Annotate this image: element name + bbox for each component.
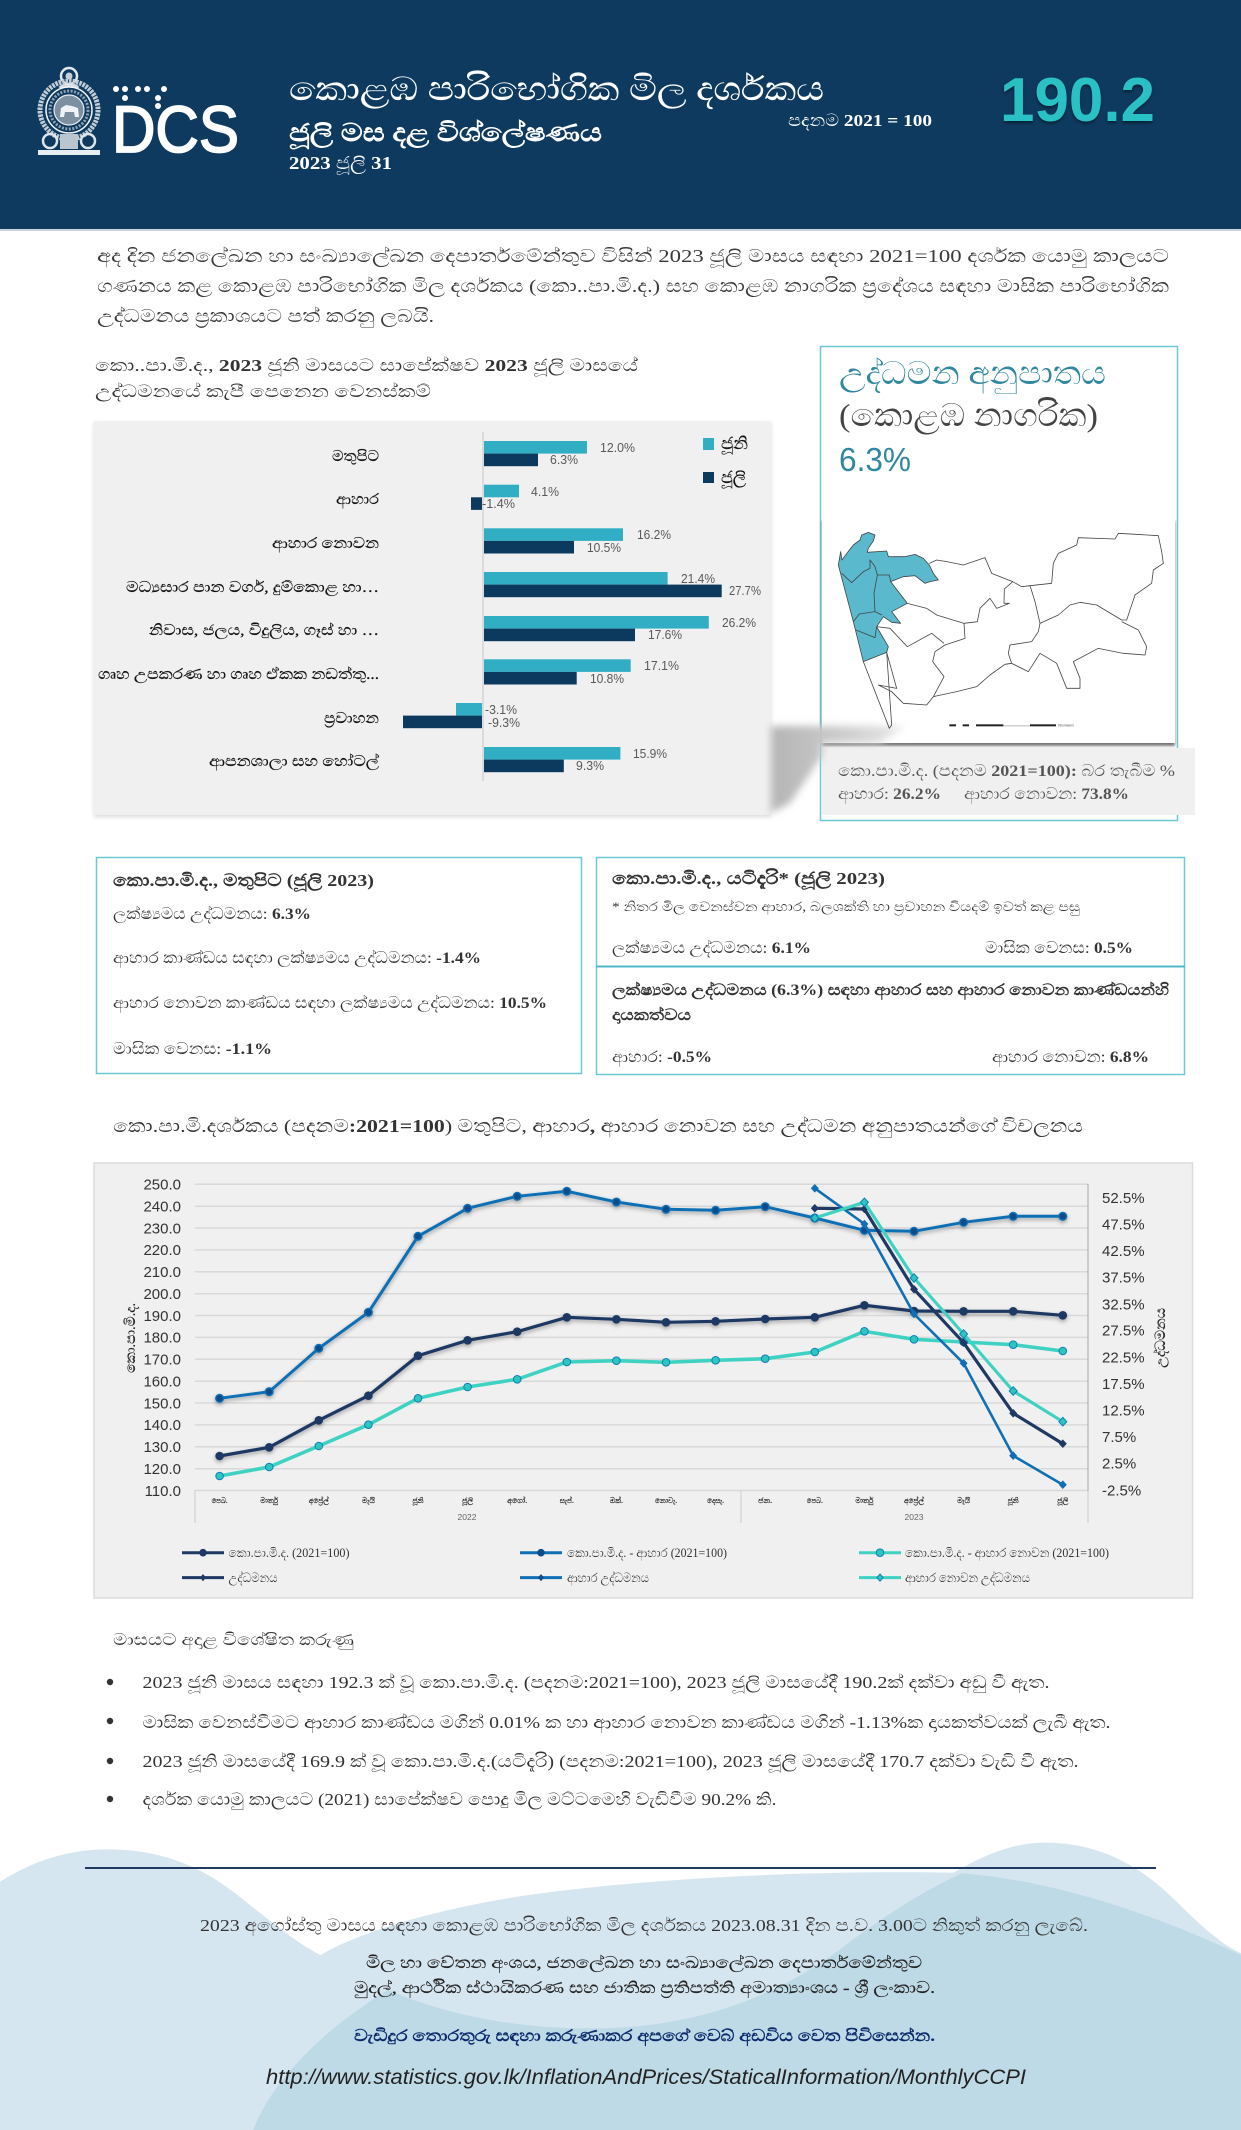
chart legend: කො.පා.මි.ද. - ආහාර (2021=100)	[567, 1546, 727, 1561]
chart legend	[182, 1546, 1109, 1586]
value labels: 6.3%	[550, 453, 578, 467]
value labels: 9.3%	[576, 759, 604, 773]
category labels: නිවාස, ජලය, විදුලිය, ගෑස් හා …	[149, 621, 379, 639]
left axis labels: 190.0	[143, 1308, 181, 1325]
value labels: 4.1%	[531, 485, 559, 499]
subheading: (කොළඹ නාගරික)	[839, 397, 1098, 434]
series: non-food index	[216, 1328, 1067, 1480]
chart legend: කො.පා.මි.ද. - ආහාර නොවන (2021=100)	[905, 1546, 1109, 1561]
year labels: 2023	[905, 1512, 924, 1522]
category labels: මතුපිට	[332, 449, 379, 465]
left axis labels: 210.0	[143, 1264, 181, 1281]
left axis labels: 140.0	[143, 1417, 181, 1434]
value labels: 16.2%	[637, 528, 671, 542]
month labels: දෙසැ.	[707, 1496, 724, 1506]
intro text	[97, 246, 1169, 327]
panel: core CCPI and contributions: ලක්ෂ්‍යමය උද්ධමනය: 6.1%	[612, 939, 811, 958]
bar chart heading: කො..පා.මි.ද., 2023 ජූනි මාසයට සාපේක්ෂව 2023 ජූලි මාසයේ	[95, 356, 638, 376]
panel: core CCPI and contributions: මාසික වෙනස: 0.5%	[985, 940, 1133, 957]
month labels: මැයි	[362, 1495, 375, 1505]
month labels: ඔක්.	[610, 1495, 623, 1505]
axis titles: කො.පා.මි.ද.	[124, 1303, 139, 1373]
right axis labels: 32.5%	[1102, 1296, 1145, 1313]
key points list: දර්ශක යොමු කාලයට (2021) සාපේක්ෂව පොදු මිල මට්ටමෙහි වැඩිවීම 90.2% කි.	[142, 1790, 776, 1810]
axis title: inflation: උද්ධමනය	[1153, 1308, 1169, 1368]
contributions: ලක්ෂ්‍යමය උද්ධමනය (6.3%) සඳහා ආහාර සහ ආහාර නොවන කාණ්ඩයන්හි	[612, 981, 1170, 1001]
month labels: මාර්තු	[855, 1495, 874, 1506]
series: headline inflation	[811, 1204, 1067, 1448]
left axis labels: 170.0	[143, 1352, 181, 1369]
category labels: මධ්‍යසාර පාන වර්ග, දුම්කොළ හා…	[126, 579, 379, 596]
left axis labels: 250.0	[143, 1176, 181, 1194]
left axis labels: 180.0	[143, 1330, 181, 1347]
category labels: ගෘහ උපකරණ හා ගෘහ ඒකක නඩත්තු...	[98, 665, 379, 683]
inflation value: 6.3%	[839, 441, 911, 478]
right axis labels: 47.5%	[1102, 1216, 1145, 1233]
panel: core CCPI and contributions: ආහාර නොවන: 6.8%	[992, 1049, 1149, 1067]
category labels: ආපනශාලා සහ හෝටල්	[209, 752, 380, 771]
right axis labels: 52.5%	[1102, 1190, 1145, 1207]
left axis labels: 240.0	[143, 1198, 181, 1216]
value labels: 17.6%	[648, 628, 682, 642]
month labels: මාර්තු	[260, 1495, 279, 1506]
month labels: මැයි	[957, 1495, 971, 1505]
month labels: පෙබ.	[212, 1495, 228, 1505]
heading: උද්ධමන අනුපාතය	[839, 355, 1106, 394]
date: 2023 ජූලි 31	[289, 153, 392, 174]
panel: line chart	[94, 1163, 1192, 1598]
series: non-food inflation	[811, 1198, 1067, 1426]
chart legend: කො.පා.මි.ද. (2021=100)	[228, 1546, 350, 1561]
core title: කො.පා.මි.ද., යටිදැරි* (ජූලි 2023)	[612, 868, 885, 890]
key points list: 2023 ජූනි මාසයේදී 169.9 ක් වූ කො.පා.මි.ද.(යටිදැරි) (පදනම:2021=100), 2023 ජූලි මාසයේදී 170.7 දක්වා වැඩි වී ඇත.	[142, 1752, 1078, 1773]
panel: headline CCPI: ලක්ෂ්‍යමය උද්ධමනය: 6.3%	[113, 905, 311, 924]
month labels: අප්‍රේල්	[904, 1495, 925, 1507]
bar chart heading	[95, 356, 638, 402]
panel: headline CCPI: ආහාර කාණ්ඩය සඳහා ලක්ෂ්‍යමය උද්ධමනය: -1.4%	[113, 949, 481, 968]
value labels	[482, 441, 761, 773]
weights box: කො.පා.මි.ද. ( පදනම 2021=100): බර තැබීම %	[838, 763, 1175, 780]
weights box	[822, 748, 1195, 815]
value labels: 21.4%	[681, 572, 715, 586]
value labels: 27.7%	[729, 584, 761, 598]
value labels: 17.1%	[644, 659, 679, 673]
month labels: සැප්.	[560, 1495, 574, 1505]
bars: July	[403, 454, 722, 772]
value labels: 26.2%	[722, 616, 756, 630]
footer url: http://www.statistics.gov.lk/InflationAndPrices/StaticalInformation/MonthlyCCPI	[266, 2066, 1026, 2089]
value labels: 10.8%	[590, 672, 624, 686]
series: food index	[216, 1188, 1067, 1402]
bar chart heading: උද්ධමනයේ කැපී පෙනෙන වෙනස්කම්	[95, 382, 431, 402]
category labels	[98, 449, 380, 771]
left axis labels: 120.0	[143, 1461, 181, 1478]
logo: DCS: DCS	[112, 92, 239, 166]
background waves	[0, 1843, 1241, 2130]
map card	[822, 518, 1175, 743]
right axis labels: 7.5%	[1102, 1429, 1136, 1446]
right axis labels: 42.5%	[1102, 1243, 1145, 1260]
intro text: උද්ධමනය ප්‍රකාශයට පත් කරනු ලබයි.	[97, 306, 434, 327]
footer department	[354, 1954, 935, 1998]
panel: headline CCPI	[96, 858, 582, 1074]
footer release note: 2023 අගෝස්තු මාසය සඳහා කොළඹ පාරිභෝගික මිල දර්ශකය 2023.08.31 දින ප.ව. 3.00ට නිකුත් කරනු ලැබේ.	[200, 1916, 1088, 1937]
panel: headline CCPI: ආහාර නොවන කාණ්ඩය සඳහා ලක්ෂ්‍යමය උද්ධමනය: 10.5%	[113, 994, 547, 1013]
month labels: ජූලි	[1056, 1495, 1070, 1507]
right axis labels	[1102, 1190, 1145, 1499]
month labels: අගෝ.	[507, 1495, 527, 1506]
right axis labels: 37.5%	[1102, 1270, 1145, 1287]
key points heading: මාසයට අදාළ විශේෂිත කරුණු	[113, 1631, 354, 1650]
right axis labels: 17.5%	[1102, 1376, 1145, 1393]
key points list	[107, 1673, 1111, 1810]
base year: පදනම 2021 = 100	[788, 111, 932, 131]
map: Sri Lanka western districts: Kilometers	[1058, 723, 1074, 727]
left axis labels: 150.0	[143, 1395, 181, 1412]
month labels: ජූලි	[461, 1495, 474, 1507]
subtitle: ජූලි මස දළ විශ්ලේෂණය	[289, 118, 602, 150]
panel: core CCPI and contributions: ආහාර: -0.5%	[612, 1049, 712, 1067]
header band	[0, 0, 1241, 231]
value labels: 15.9%	[633, 747, 667, 761]
series: food inflation	[811, 1184, 1067, 1489]
title: කොළඹ පාරිභෝගික මිල දර්ශකය	[289, 70, 824, 109]
month labels: පෙබ.	[807, 1495, 823, 1505]
month labels: නොවැ.	[655, 1495, 677, 1505]
right axis labels: 2.5%	[1102, 1456, 1136, 1473]
icon: national emblem	[38, 68, 100, 155]
month labels: ජූනි	[1007, 1495, 1020, 1506]
legend: June and July: ජූනි	[721, 434, 748, 454]
value labels: -9.3%	[488, 716, 520, 730]
left axis labels: 160.0	[143, 1374, 181, 1390]
chart cast shadow	[771, 726, 905, 813]
line chart heading: කො.පා.මි.දර්ශකය (පදනම :2021=100 ) මතුපිට, ආහාර , ආහාර නොවන සහ උද්ධමන අනුපාතයන්ගේ විචලනය	[113, 1116, 1083, 1138]
category labels: ප්‍රවාහන	[324, 711, 379, 728]
panel: bar chart	[94, 421, 771, 815]
left axis labels: 130.0	[143, 1439, 181, 1456]
panel: headline CCPI: මාසික වෙනස: -1.1%	[113, 1041, 272, 1058]
category labels: ආහාර නොවන	[272, 536, 379, 553]
key points list: 2023 ජූනි මාසය සඳහා 192.3 ක් වූ කො.පා.මි.ද. (පදනම:2021=100), 2023 ජූලි මාසයේදී 190.2ක් දක්වා අඩු වී ඇත.	[142, 1673, 1050, 1694]
right axis labels: 27.5%	[1102, 1323, 1145, 1340]
footer department: මුදල්, ආර්ථික ස්ථායිකරණ සහ ජාතික ප්‍රතිපත්ති අමාත්‍යාංශය - ශ්‍රී ලංකාව.	[354, 1979, 935, 1998]
left axis labels	[143, 1176, 181, 1500]
right axis labels: -2.5%	[1102, 1482, 1141, 1499]
value labels: -1.4%	[482, 497, 515, 511]
series: headline index	[216, 1302, 1067, 1460]
panel: inflation rate	[820, 346, 1195, 820]
chart legend: උද්ධමනය	[228, 1570, 278, 1586]
right axis labels: 12.5%	[1102, 1402, 1145, 1419]
headline index value: 190.2	[1000, 66, 1155, 135]
box title: කො.පා.මි.ද., මතුපිට (ජූලි 2023)	[113, 871, 374, 892]
footer department: මිල හා වේතන අංශය, ජනලේඛන හා සංඛ්‍යාලේඛන දෙපාර්තමේන්තුව	[366, 1954, 922, 1973]
weights box: ආහාර නොවන: 73.8%	[964, 786, 1129, 804]
intro text: අද දින ජනලේඛන හා සංඛ්‍යාලේඛන දෙපාර්තමේන්තුව විසින් 2023 ජූලි මාසය සඳහා 2021=100 දර්ශක යොමු කාලයට	[97, 246, 1169, 268]
legend: June and July	[703, 434, 748, 488]
intro text: ගණනය කළ කොළඹ පාරිභෝගික මිල දර්ශකය (කො..පා.මි.ද.) සහ කොළඹ නාගරික ප්‍රදේශය සඳහා මාසික පාරිභෝගික	[97, 276, 1169, 297]
month labels: ජන.	[758, 1495, 772, 1505]
year labels	[458, 1512, 924, 1522]
legend: June and July: ජූලි	[721, 468, 746, 488]
bars: June	[456, 441, 709, 760]
value labels: -3.1%	[485, 703, 517, 717]
panel: core CCPI and contributions	[596, 858, 1185, 1074]
left axis labels: 220.0	[143, 1242, 181, 1259]
value labels: 10.5%	[587, 541, 621, 555]
chart legend: ආහාර නොවන උද්ධමනය	[905, 1570, 1030, 1586]
key points list: මාසික වෙනස්වීමට ආහාර කාණ්ඩය මගින් 0.01% ක හා ආහාර නොවන කාණ්ඩය මගින් -1.13%ක දායකත්වයක් ලැබී ඇත.	[142, 1713, 1110, 1734]
map: Sri Lanka western districts	[838, 532, 1163, 728]
month labels: අප්‍රේල්	[309, 1495, 330, 1507]
weights box: ආහාර: 26.2%	[838, 786, 941, 804]
left axis labels: 200.0	[143, 1286, 181, 1303]
chart legend: ආහාර උද්ධමනය	[567, 1570, 649, 1586]
value labels: 12.0%	[600, 441, 635, 455]
left axis labels: 110.0	[145, 1483, 181, 1500]
month labels: ජූනි	[412, 1495, 424, 1506]
footer call to action: වැඩිදුර තොරතුරු සඳහා කරුණාකර අපගේ වෙබ් අඩවිය වෙත පිවිසෙන්න.	[354, 2027, 935, 2047]
year labels: 2022	[458, 1512, 477, 1522]
panel: core CCPI and contributions: දායකත්වය	[612, 1006, 692, 1025]
category labels: ආහාර	[336, 492, 379, 509]
right axis labels: 22.5%	[1102, 1349, 1145, 1366]
month labels	[212, 1495, 1070, 1507]
panel: core CCPI and contributions: * නිතර මිල වෙනස්වන ආහාර, බලශක්ති හා ප්‍රවාහන වියදම් ඉවත් කළ පසු	[612, 899, 1080, 915]
left axis labels: 230.0	[143, 1220, 181, 1237]
